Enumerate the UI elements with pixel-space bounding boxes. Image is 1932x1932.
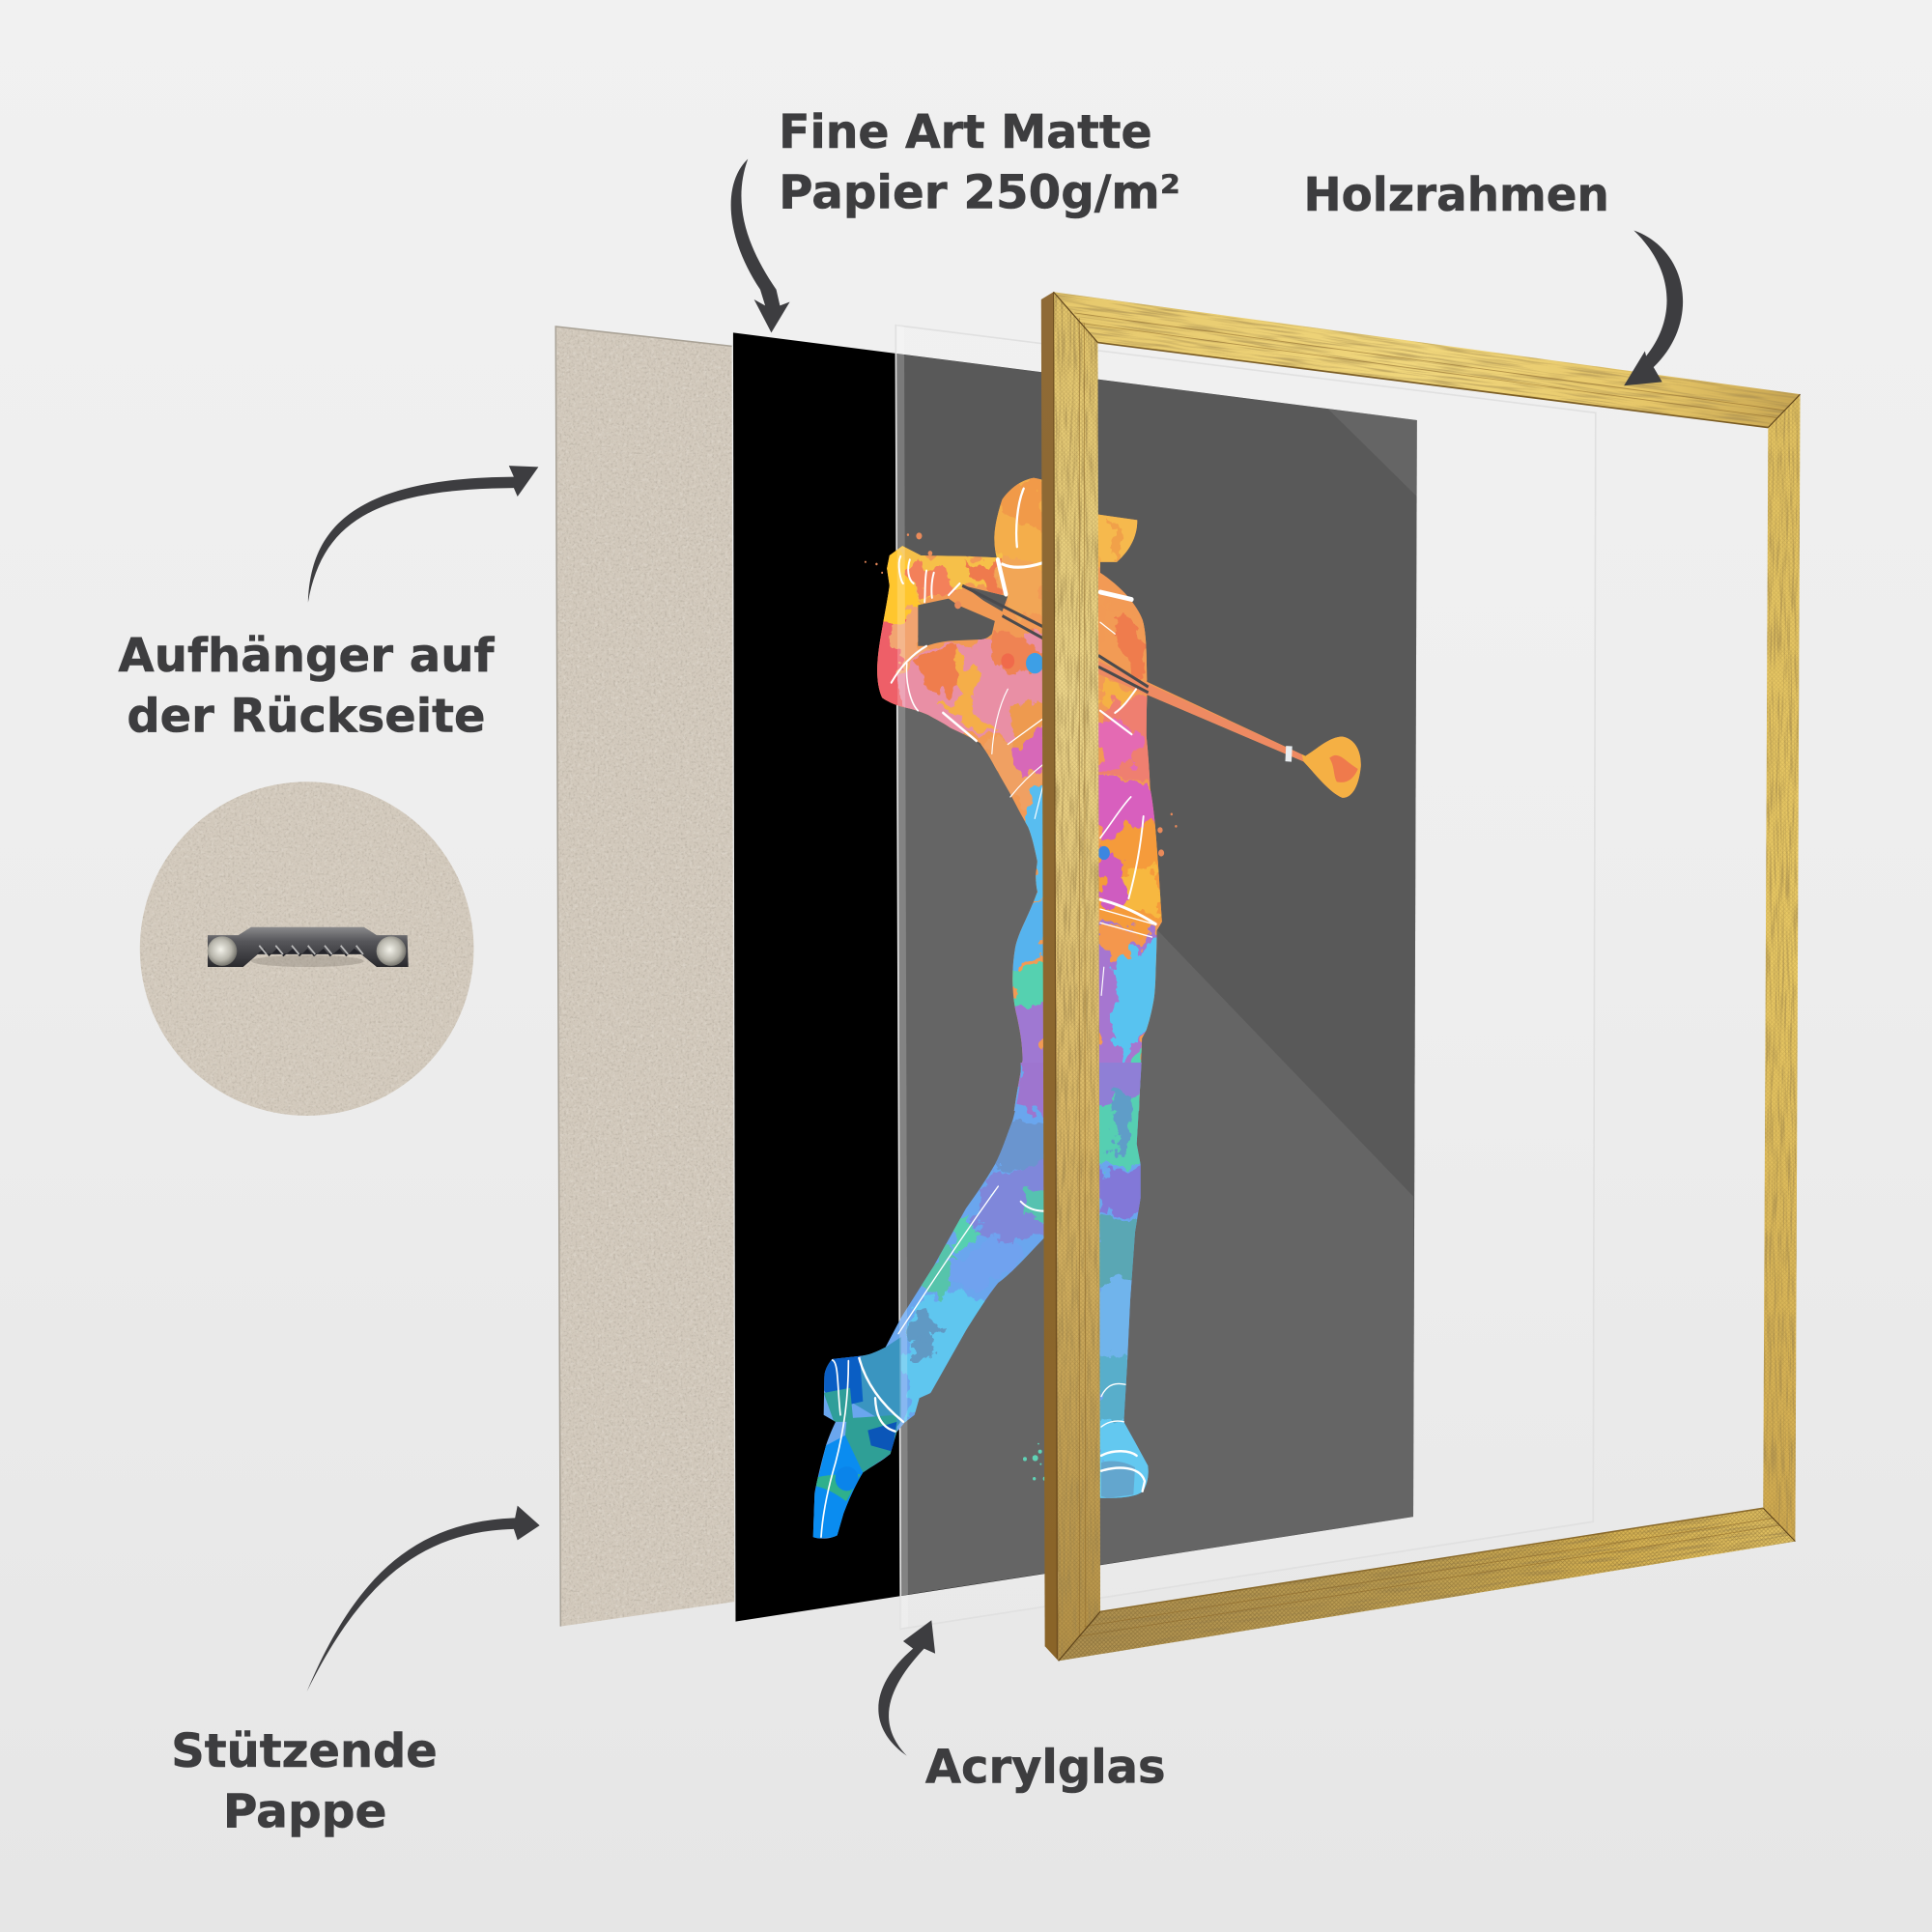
- arrow: to fine art paper: [731, 159, 790, 332]
- golfer legs and shoes: [805, 1056, 1159, 1544]
- heading: Acrylglas: Acrylglas: [925, 1742, 1166, 1795]
- arrow: to supporting cardboard: [307, 1506, 540, 1691]
- frame bottom bar: [1059, 1508, 1795, 1661]
- heading: Aufhänger auf der Rückseite: der Rückseite: [127, 691, 486, 744]
- frame left bar: [1054, 292, 1100, 1661]
- panel: black fine art paper: [733, 332, 1417, 1622]
- green paint splatter: [1023, 1443, 1047, 1481]
- arrow: to hanger on backing: [308, 466, 538, 603]
- arrow: to wooden frame: [1624, 231, 1683, 385]
- panel: supporting cardboard backing: [549, 321, 746, 1633]
- panel: gold wooden frame: [1041, 292, 1801, 1662]
- heading: Aufhänger auf der Rückseite: Aufhänger auf: [118, 630, 496, 683]
- heading: Stützende Pappe: Stützende: [171, 1725, 438, 1778]
- arrow: to acrylic glass: [878, 1620, 935, 1756]
- heading: Stützende Pappe: Pappe: [223, 1786, 387, 1839]
- heading: Fine Art Matte Papier: Fine Art Matte: [779, 106, 1152, 159]
- paint splatter drops: [865, 532, 1178, 857]
- white brush strokes on golfer: [892, 489, 1289, 995]
- golfer upper body and club: [858, 461, 1376, 1124]
- heading: Holzrahmen: Holzrahmen: [1303, 169, 1609, 222]
- golfer illustration: [805, 461, 1376, 1544]
- heading: Stützende Pappe: [171, 1725, 438, 1839]
- acrylic left edge highlight: [896, 325, 908, 1629]
- frame right bar: [1763, 394, 1801, 1542]
- icon: sawtooth hanger: [208, 927, 409, 967]
- frame side face: [1041, 292, 1059, 1661]
- panel: acrylic glass sheet: [895, 326, 1596, 1629]
- heading: Aufhänger auf der Rückseite: [118, 630, 496, 744]
- icon: round hanger detail on cardboard: [135, 777, 480, 1122]
- club shaft dark lines: [962, 585, 1149, 693]
- white brush strokes on legs: [821, 1186, 1145, 1537]
- frame top bar: [1054, 292, 1801, 428]
- heading: Fine Art Matte Papier: [779, 106, 1180, 220]
- heading: Fine Art Matte Papier: Papier 250g/m²: [779, 167, 1180, 220]
